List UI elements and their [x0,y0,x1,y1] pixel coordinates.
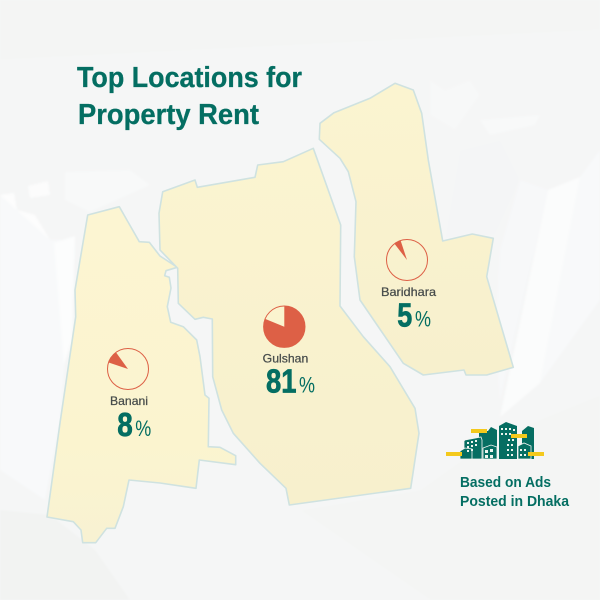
value: Banani 8%: % [135,416,151,441]
map region: Banani [47,207,236,543]
title: Top Locations for [77,62,302,94]
value: Gulshan 81%: 81 [266,363,296,400]
pie chart: Baridhara 5% [386,240,428,280]
label: Banani: Banani [110,394,148,408]
note: based on ads: Based on Ads [460,475,551,491]
value: Baridhara 5%: % [415,307,431,332]
label: Baridhara: Baridhara [381,285,436,299]
pie chart: Banani 8% [108,348,148,390]
value: Gulshan 81%: % [299,373,315,398]
map region: Baridhara [319,83,513,375]
note: based on ads: Posted in Dhaka [460,494,570,510]
title: Property Rent [78,99,259,131]
pie chart: Gulshan 81% [264,306,305,347]
label: Gulshan: Gulshan [263,352,308,366]
value: Baridhara 5%: 5 [397,297,412,334]
value: Banani 8%: 8 [117,406,133,443]
map region: Gulshan [159,148,419,505]
icon: city buildings [446,422,544,459]
